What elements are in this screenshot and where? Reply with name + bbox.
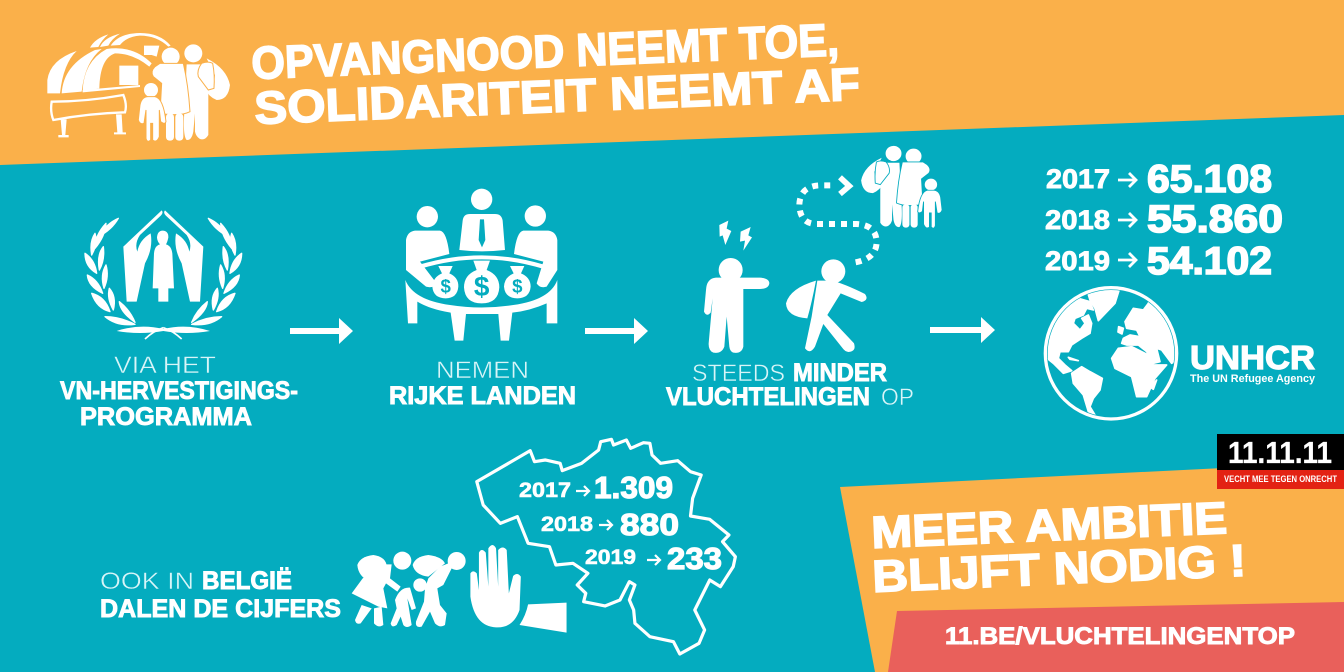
arrow 1 bbox=[290, 318, 353, 344]
text: steeds minder vluchtelingen op: MINDER bbox=[793, 359, 887, 387]
icon: person refusing refugee bbox=[704, 221, 867, 353]
arrow 3 bbox=[930, 317, 995, 343]
text: nemen rijke landen bbox=[389, 357, 576, 410]
text: nemen rijke landen: RIJKE LANDEN bbox=[389, 382, 576, 410]
call to action heading: BLIJFT NODIG ! bbox=[871, 535, 1247, 602]
icon: stop hand bbox=[470, 545, 567, 633]
world resettlement figures: 2018 bbox=[1045, 205, 1110, 235]
Belgian resettlement figures: 233 bbox=[667, 541, 722, 576]
icon: globe bbox=[1043, 287, 1180, 419]
icon: rich countries around a money table: $ bbox=[512, 276, 523, 297]
protected person bbox=[153, 231, 174, 302]
title: SOLIDARITEIT NEEMT AF bbox=[253, 58, 861, 134]
text: steeds minder vluchtelingen op: OP bbox=[881, 384, 914, 411]
title bbox=[250, 13, 861, 134]
world resettlement figures: 2019 bbox=[1045, 246, 1110, 276]
world resettlement figures bbox=[1045, 158, 1283, 283]
right hand bbox=[164, 210, 203, 302]
UNHCR logo: UNHCR bbox=[1190, 339, 1315, 376]
URL banner bbox=[888, 602, 1344, 672]
Belgian resettlement figures: 1.309 bbox=[594, 470, 673, 505]
Belgian resettlement figures: 2017 bbox=[519, 479, 571, 502]
text: steeds minder vluchtelingen op bbox=[666, 359, 914, 411]
text: via het VN-hervestigingsprogramma: PROGRAMMA bbox=[80, 403, 252, 431]
logo: 11.11.11 bbox=[1217, 434, 1344, 489]
text: ook in België dalen de cijfers bbox=[100, 567, 341, 623]
Belgian resettlement figures: 2019 bbox=[585, 546, 636, 569]
left hand bbox=[123, 210, 163, 302]
icon: resettled family bbox=[861, 146, 942, 228]
world resettlement figures: 55.860 bbox=[1147, 198, 1283, 241]
text: via het VN-hervestigingsprogramma: VN-HERVESTIGINGS- bbox=[60, 377, 298, 405]
URL banner: 11.BE/VLUCHTELINGENTOP bbox=[945, 623, 1295, 650]
right laurel branch bbox=[192, 218, 242, 325]
Belgian resettlement figures: 2018 bbox=[541, 513, 593, 536]
panel: call to action bbox=[840, 462, 1344, 672]
dotted path arrow bbox=[799, 177, 877, 262]
icon: rich countries around a money table: $ bbox=[440, 276, 451, 297]
text: ook in België dalen de cijfers: BELGIË bbox=[202, 567, 292, 595]
text: steeds minder vluchtelingen op: VLUCHTELINGEN bbox=[666, 383, 870, 411]
Belgian resettlement figures bbox=[519, 470, 722, 576]
title: OPVANGNOOD NEEMT TOE, bbox=[250, 13, 840, 89]
text: ook in België dalen de cijfers: DALEN DE CIJFERS bbox=[100, 595, 341, 623]
header band bbox=[0, 0, 1344, 165]
text: ook in België dalen de cijfers: OOK IN bbox=[100, 568, 194, 595]
map of Belgium bbox=[477, 439, 735, 654]
world resettlement figures: 2017 bbox=[1046, 164, 1110, 194]
icon: refugee camp and family bbox=[47, 33, 230, 141]
call to action heading bbox=[870, 492, 1247, 602]
icon: walking refugees bbox=[352, 552, 466, 627]
icon: rich countries around a money table bbox=[405, 189, 557, 341]
world resettlement figures: 54.102 bbox=[1147, 240, 1272, 283]
text: steeds minder vluchtelingen op: STEEDS bbox=[692, 360, 785, 387]
text: nemen rijke landen: NEMEN bbox=[436, 357, 529, 384]
logo: 11.11.11: 11.11.11 bbox=[1228, 435, 1332, 470]
text: via het VN-hervestigingsprogramma: VIA HET bbox=[114, 352, 216, 379]
world resettlement figures: 65.108 bbox=[1147, 158, 1272, 201]
call to action heading: MEER AMBITIE bbox=[870, 492, 1228, 558]
UNHCR logo: The UN Refugee Agency bbox=[1190, 373, 1316, 385]
icon: rich countries around a money table: $ bbox=[474, 271, 490, 302]
Belgian resettlement figures: 880 bbox=[620, 507, 679, 542]
text: via het VN-hervestigingsprogramma bbox=[60, 352, 298, 431]
left laurel branch bbox=[85, 218, 135, 325]
arrow 2 bbox=[585, 318, 648, 344]
icon: UNHCR laurel logo bbox=[85, 210, 242, 339]
